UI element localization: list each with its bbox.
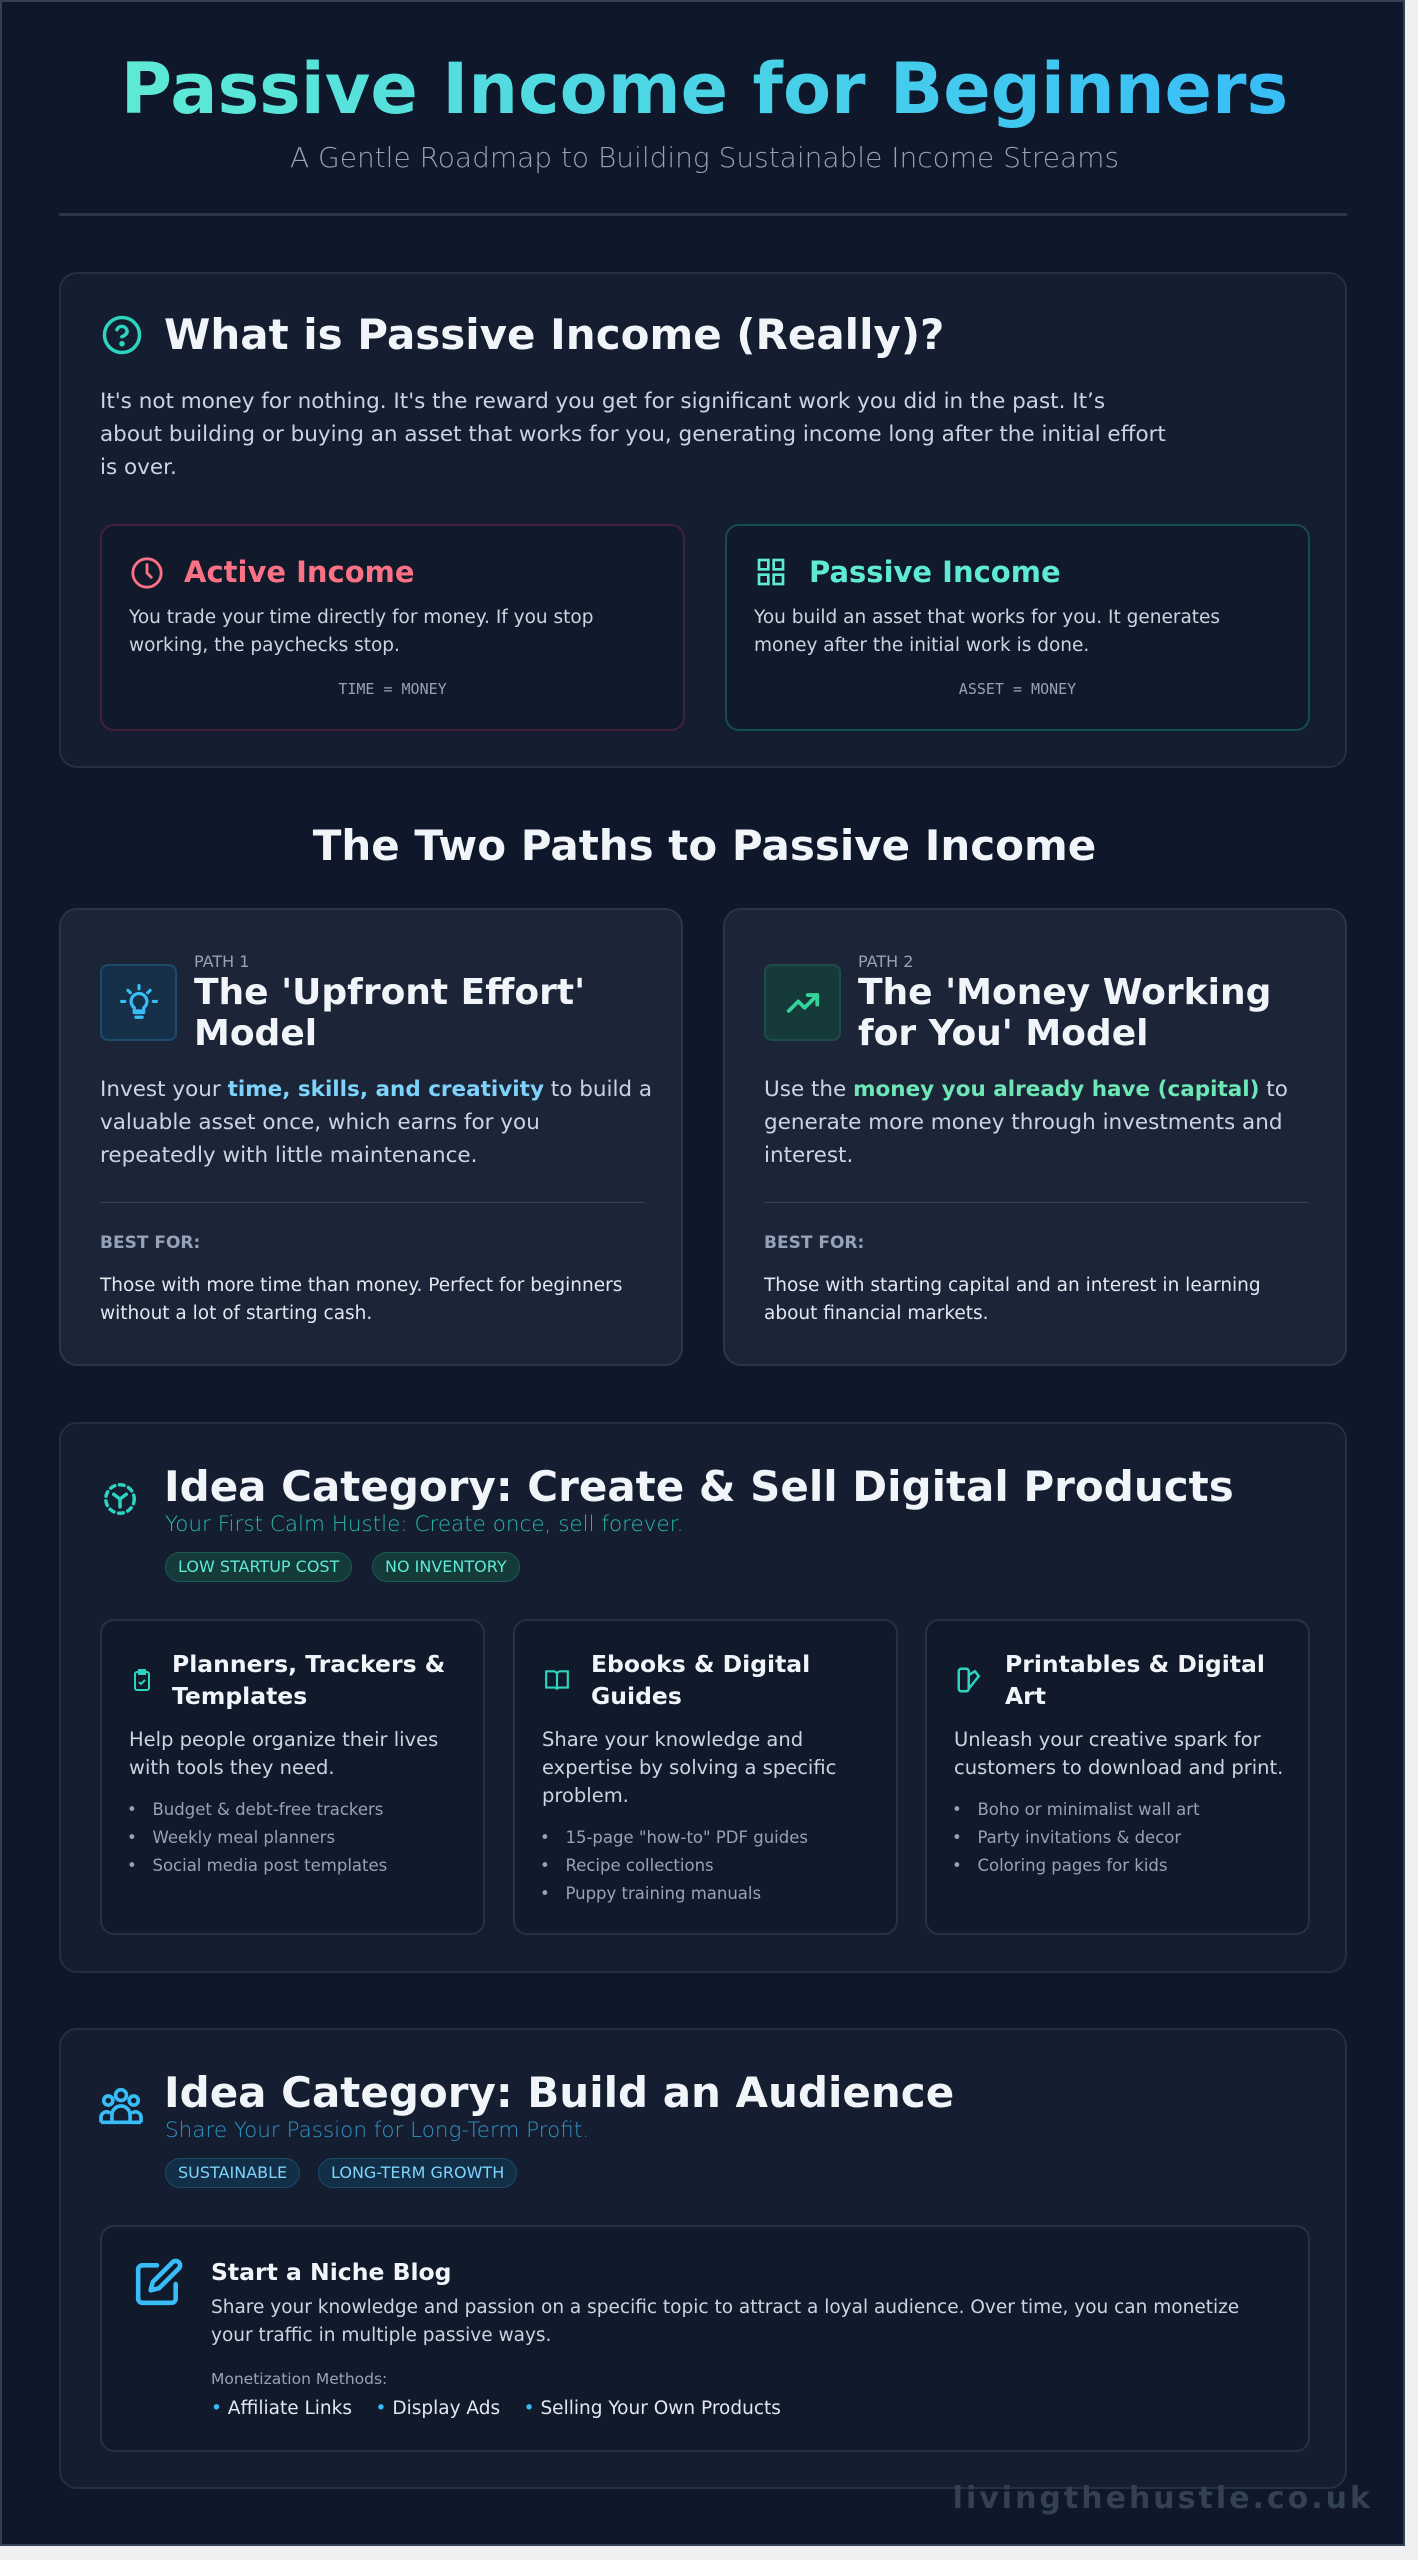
panel: path 1: PATH 1: [194, 952, 249, 971]
heading: What is Passive Income (Really)?: [164, 310, 944, 359]
panel: path 1: [59, 908, 683, 1366]
panel: path 2: [723, 908, 1347, 1366]
title: Passive Income for Beginners: [121, 48, 1288, 130]
card: ebooks: • Puppy training manuals: [540, 1884, 761, 1903]
panel: path 2: BEST FOR:: [764, 1233, 864, 1253]
card: active income: Active Income: [184, 555, 415, 589]
card: niche blog: Start a Niche Blog: [211, 2258, 452, 2286]
tags: LOW STARTUP COST: [178, 1557, 339, 1576]
icon: product: [104, 1483, 136, 1515]
card: ebooks: Ebooks & Digital Guides: [591, 1650, 810, 1710]
card: planners: • Budget & debt-free trackers: [127, 1800, 383, 1819]
icon: edit: [136, 2258, 182, 2306]
panel: build an audience: Idea Category: Build an Audience: [164, 2068, 954, 2117]
icon: clock: [131, 557, 163, 589]
card: niche blog: Share your knowledge and passion on a specific topic to attract a loyal audience. Over time, you can monetize your traffic in multiple passive ways.: [211, 2297, 1239, 2346]
panel: path 2: Use the money you already have (capital) to generate more money through investments and interest.: [764, 1077, 1288, 1168]
card: ebooks: Share your knowledge and expertise by solving a specific problem.: [542, 1728, 836, 1807]
icon: grid: [758, 558, 784, 586]
panel: build an audience: [59, 2028, 1347, 2489]
card: niche blog: Monetization Methods:: [211, 2370, 387, 2388]
card: printables: • Party invitations & decor: [952, 1828, 1181, 1847]
panel: build an audience: Share Your Passion for Long-Term Profit.: [165, 2118, 589, 2143]
card: ebooks: • Recipe collections: [540, 1856, 714, 1875]
card: printables: [925, 1619, 1310, 1935]
card: planners: [100, 1619, 485, 1935]
heading: two paths: The Two Paths to Passive Income: [313, 821, 1096, 870]
intro text: [100, 389, 1166, 480]
icon: question: [102, 316, 142, 354]
card: planners: Planners, Trackers & Templates: [172, 1650, 445, 1710]
card: printables: Printables & Digital Art: [1005, 1650, 1265, 1710]
card: planners: • Social media post templates: [127, 1856, 387, 1875]
card: printables: Unleash your creative spark for customers to download and print.: [954, 1728, 1283, 1779]
icon: bulb: [100, 964, 177, 1041]
card: niche blog: [100, 2225, 1310, 2452]
card: active income: TIME = MONEY: [338, 680, 447, 698]
watermark: livingthehustle.co.uk: [953, 2481, 1373, 2516]
card: passive income: Passive Income: [809, 555, 1061, 589]
panel: build an audience: LONG-TERM GROWTH: [331, 2163, 504, 2182]
intro text: about building or buying an asset that works for you, generating income long after the initial effort: [100, 422, 1166, 447]
card: passive income: [725, 524, 1310, 731]
card: printables: • Boho or minimalist wall art: [952, 1800, 1200, 1819]
intro text: It's not money for nothing. It's the reward you get for significant work you did in the past. It’s: [100, 389, 1105, 414]
panel: what is passive income: [59, 272, 1347, 768]
intro text: is over.: [100, 455, 177, 480]
panel: path 1: Those with more time than money. Perfect for beginners without a lot of starting cash.: [100, 1275, 622, 1324]
card: active income: [100, 524, 685, 731]
card: passive income: You build an asset that works for you. It generates money after the initial work is done.: [754, 607, 1220, 656]
tags: [165, 1552, 352, 1582]
panel: path 2: PATH 2: [858, 952, 913, 971]
panel: digital products: [59, 1422, 1347, 1973]
card: ebooks: [513, 1619, 898, 1935]
card: passive income: ASSET = MONEY: [959, 680, 1076, 698]
tags: SUSTAINABLE: [178, 2163, 287, 2182]
card: niche blog: • Affiliate Links • Display Ads • Selling Your Own Products: [211, 2398, 781, 2419]
panel: path 1: The 'Upfront Effort' Model: [194, 972, 585, 1054]
subtitle: A Gentle Roadmap to Building Sustainable Income Streams: [290, 141, 1119, 174]
panel: digital products: NO INVENTORY: [385, 1557, 507, 1576]
panel: path 2: The 'Money Working for You' Model: [858, 972, 1271, 1054]
tags: [165, 2158, 300, 2188]
panel: path 1: BEST FOR:: [100, 1233, 200, 1253]
panel: digital products: Idea Category: Create & Sell Digital Products: [164, 1462, 1234, 1511]
card: printables: • Coloring pages for kids: [952, 1856, 1168, 1875]
card: active income: You trade your time directly for money. If you stop working, the paychecks stop.: [129, 607, 594, 656]
card: planners: Help people organize their lives with tools they need.: [129, 1728, 438, 1779]
card: ebooks: • 15-page "how-to" PDF guides: [540, 1828, 808, 1847]
card: planners: • Weekly meal planners: [127, 1828, 335, 1847]
panel: path 2: Those with starting capital and an interest in learning about financial markets.: [764, 1275, 1261, 1324]
panel: path 1: Invest your time, skills, and creativity to build a valuable asset once, which earns for you repeatedly with little maintenance.: [100, 1077, 652, 1168]
panel: digital products: Your First Calm Hustle: Create once, sell forever.: [165, 1512, 683, 1537]
icon: trend: [764, 964, 841, 1041]
icon: people: [99, 2088, 143, 2124]
